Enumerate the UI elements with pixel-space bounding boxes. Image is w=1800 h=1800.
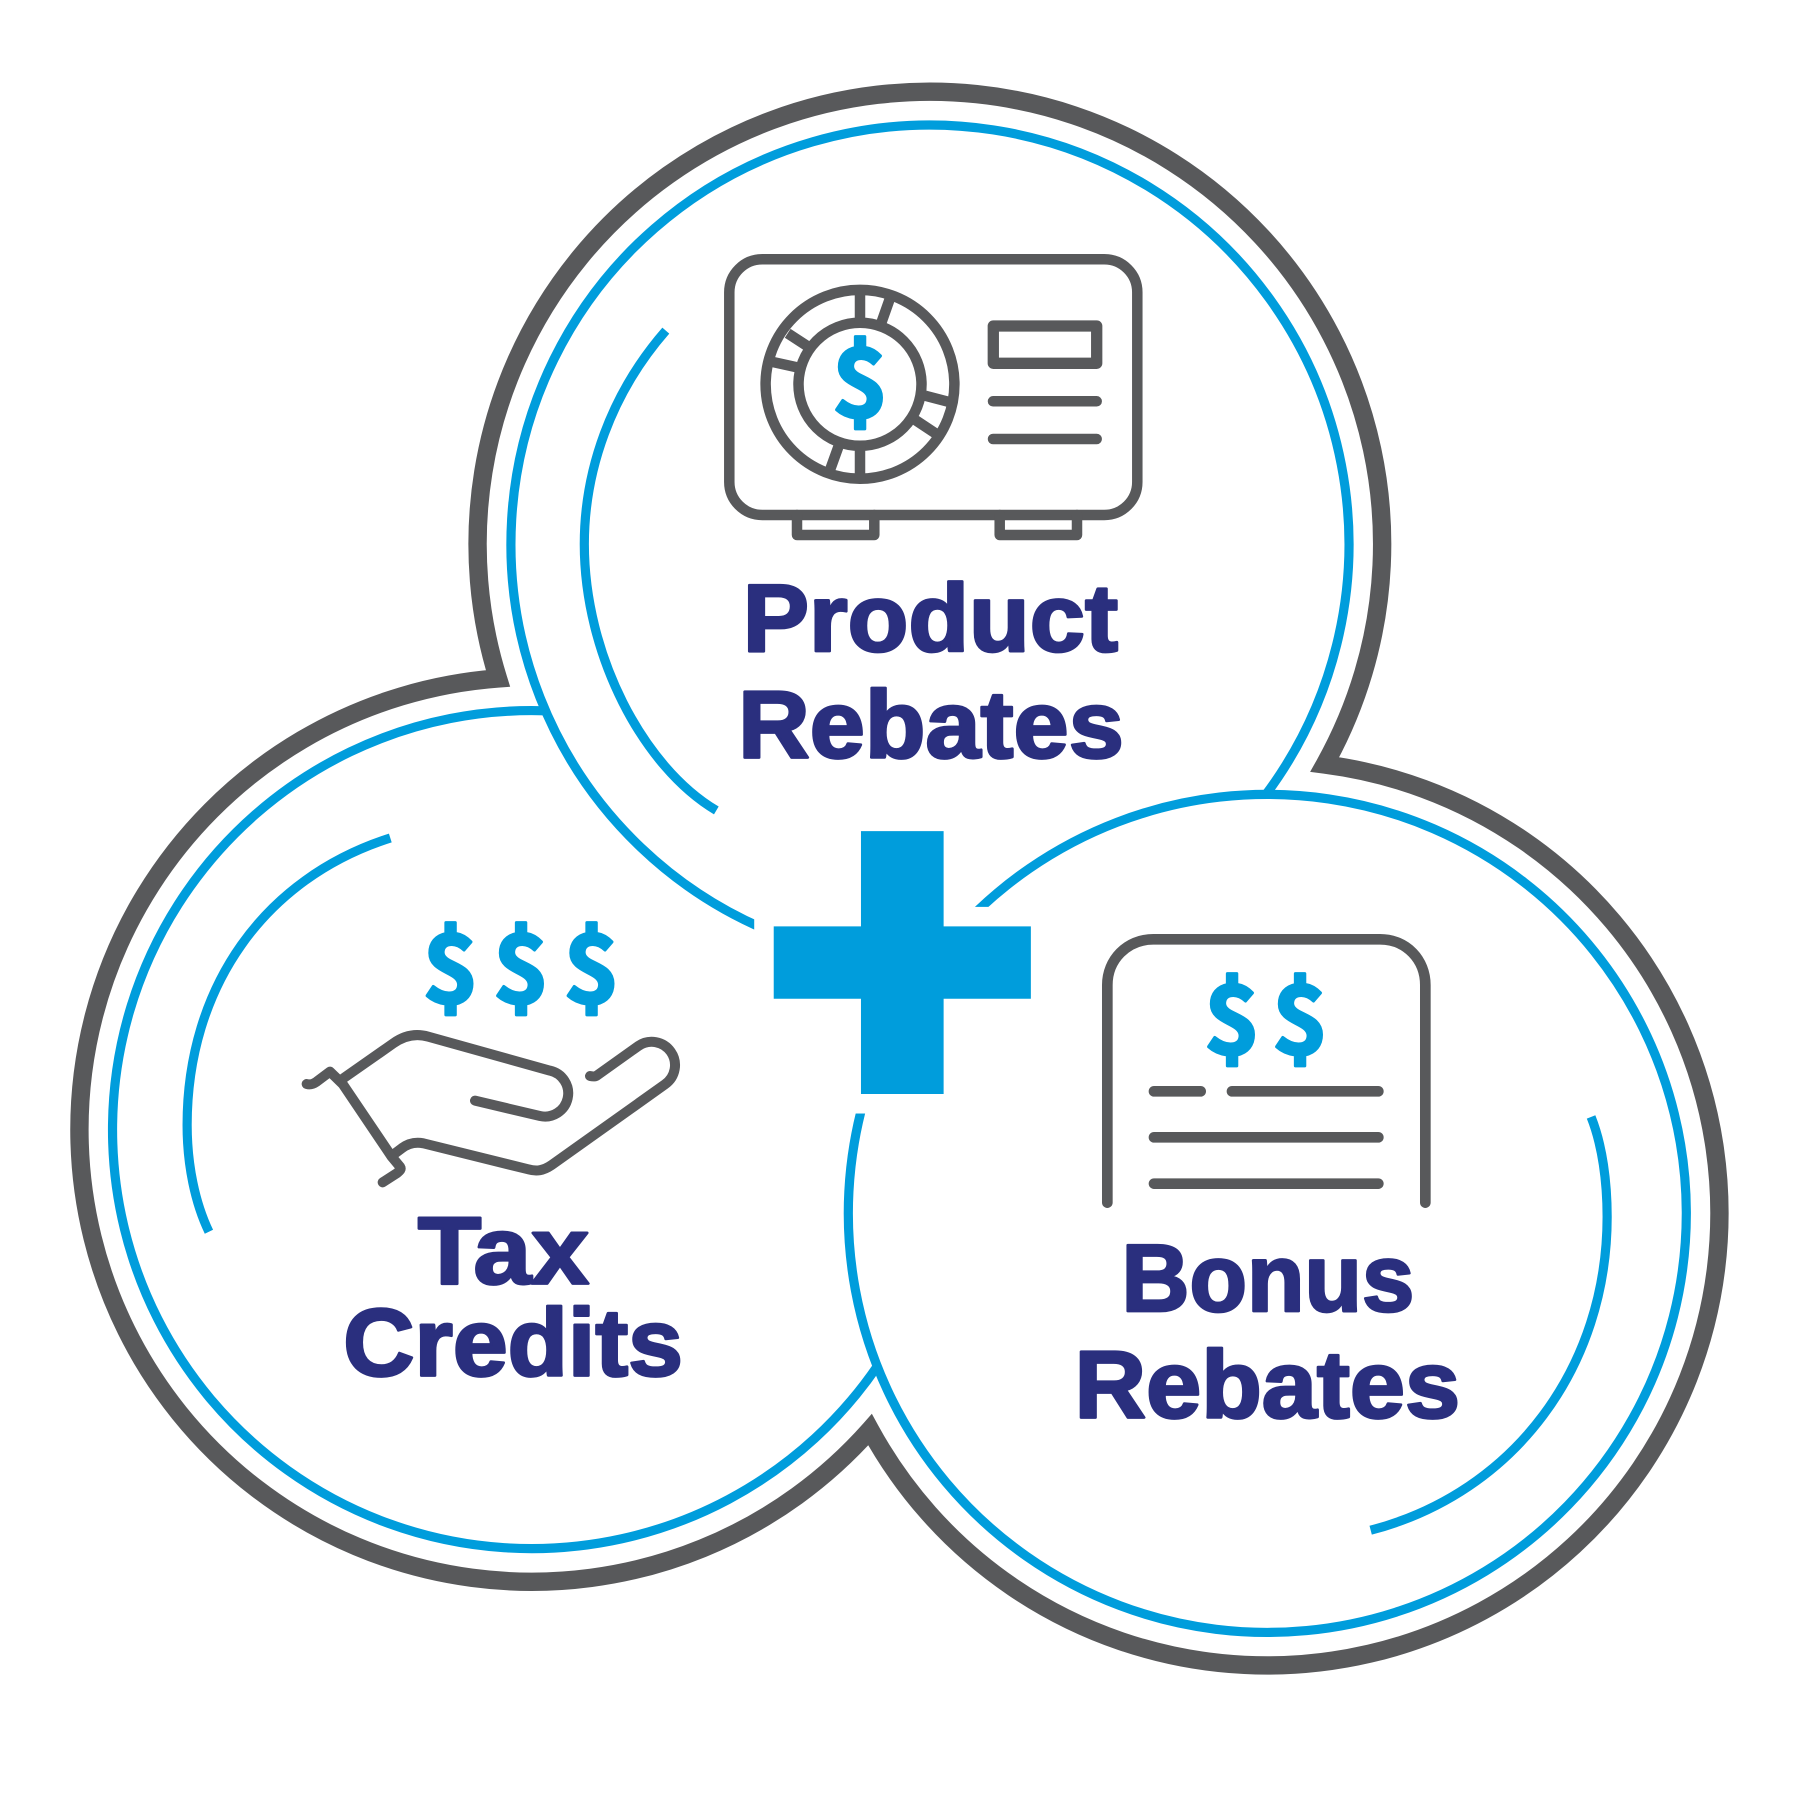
heading: Bonus Rebates	[1074, 1226, 1460, 1439]
heading: Bonus Rebates: Rebates	[1074, 1333, 1460, 1439]
heading: Product Rebates: Rebates	[738, 673, 1124, 779]
icon: open hand with three dollar signs: $	[493, 894, 549, 1031]
icon: document with two dollar signs: $	[1272, 945, 1328, 1082]
blue ring: top circle	[511, 125, 1349, 936]
heading: Tax Credits	[343, 1198, 683, 1396]
icon: open hand with three dollar signs: $	[422, 894, 479, 1031]
icon: open hand with three dollar signs	[307, 894, 675, 1182]
icon: open hand with three dollar signs: $	[563, 894, 620, 1031]
heading: Tax Credits: Tax	[418, 1198, 589, 1304]
icon: document with two dollar signs	[1107, 939, 1425, 1203]
icon: safe with dollar dial	[729, 259, 1137, 535]
blue ring: right circle	[848, 794, 1686, 1632]
heading: Tax Credits: Credits	[343, 1290, 683, 1396]
plus sign	[774, 831, 1031, 1094]
inner accent arc: right circle	[1371, 1117, 1607, 1530]
blue ring: left circle	[113, 711, 877, 1549]
outer gray outline of three overlapping circles	[79, 92, 1719, 1665]
heading: Product Rebates: Product	[743, 566, 1118, 672]
heading: Bonus Rebates: Bonus	[1122, 1226, 1414, 1332]
icon: safe with dollar dial: $	[832, 308, 888, 445]
inner accent arc: left circle	[187, 838, 390, 1232]
heading: Product Rebates	[738, 566, 1124, 779]
icon: document with two dollar signs: $	[1204, 945, 1260, 1082]
inner accent arc: top circle	[584, 331, 716, 810]
